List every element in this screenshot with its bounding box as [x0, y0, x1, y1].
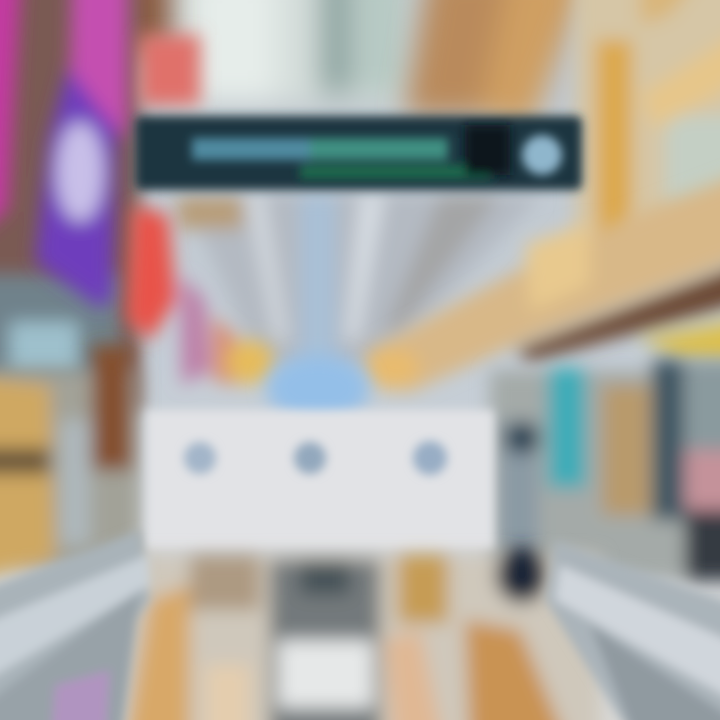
left side: dark wall and posts [0, 0, 140, 410]
blue glow above panel [266, 354, 370, 422]
diagonal wooden beam [364, 170, 720, 392]
right escalator [545, 540, 720, 720]
left banners: red and coral [126, 35, 274, 385]
left banners: pink and purple [0, 0, 128, 308]
dark hanging sign [135, 116, 582, 190]
panel icon: right [413, 441, 447, 475]
right side: gold beams and wall [575, 0, 720, 255]
ceiling: wood top [120, 0, 590, 125]
panel icon: left [184, 442, 216, 474]
central hall: columns [178, 195, 540, 370]
left shopfronts [0, 345, 140, 580]
white information panel [146, 410, 494, 550]
sign: round icon [522, 135, 562, 175]
right shopfronts [490, 360, 720, 580]
ceiling: skylight [170, 0, 410, 105]
lower atrium: shops below [120, 547, 600, 720]
left escalator [0, 530, 150, 720]
sign: blurred lettering [192, 125, 510, 179]
panel icon: middle [294, 442, 326, 474]
